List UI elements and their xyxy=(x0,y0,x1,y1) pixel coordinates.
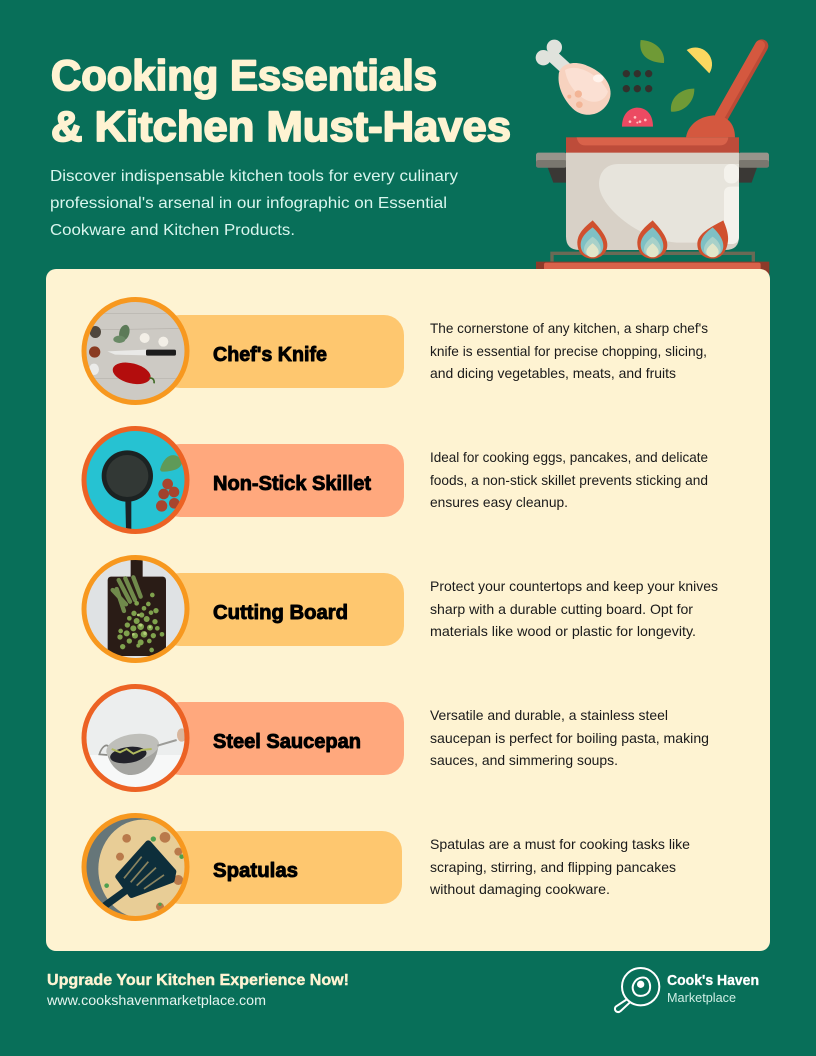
description: and dicing vegetables, meats, and fruits xyxy=(430,365,676,381)
icon: peppercorns xyxy=(623,70,652,92)
description xyxy=(430,578,718,639)
item: non-stick skillet xyxy=(80,423,708,533)
description: ensures easy cleanup. xyxy=(430,494,568,510)
photo: skillet and tomatoes xyxy=(86,431,184,529)
title: & Kitchen Must-Haves xyxy=(51,103,511,151)
icon: flames xyxy=(577,220,728,259)
intro text: professional's arsenal in our infographic on Essential xyxy=(50,195,447,212)
label pill xyxy=(160,702,404,775)
description xyxy=(430,320,708,381)
title xyxy=(51,52,511,151)
label: Steel Saucepan xyxy=(213,731,361,753)
description xyxy=(429,836,690,897)
description: The cornerstone of any kitchen, a sharp chef's xyxy=(430,320,708,336)
icon: wooden spoon xyxy=(686,45,762,137)
item: chef's knife xyxy=(80,297,708,407)
photo ring xyxy=(84,428,187,532)
label pill xyxy=(160,831,402,904)
item: steel saucepan xyxy=(80,682,709,792)
description: Protect your countertops and keep your knives xyxy=(430,578,718,594)
photo ring xyxy=(84,558,187,660)
photo ring xyxy=(84,816,187,918)
footer call to action: www.cookshavenmarketplace.com xyxy=(46,993,266,1008)
icon: stove grate xyxy=(536,253,769,276)
item: spatulas xyxy=(80,812,690,922)
icon: lemon slice xyxy=(687,48,712,73)
description: saucepan is perfect for boiling pasta, making xyxy=(430,730,709,746)
description: sauces, and simmering soups. xyxy=(430,752,618,768)
description: foods, a non-stick skillet prevents sticking and xyxy=(430,472,708,488)
title: Cooking Essentials xyxy=(51,52,437,100)
footer call to action: Upgrade Your Kitchen Experience Now! xyxy=(47,972,349,989)
photo: knife, pepper and herbs xyxy=(86,302,184,400)
description: materials like wood or plastic for longevity. xyxy=(430,623,696,639)
logo: Cook's Haven Marketplace xyxy=(615,968,759,1012)
icon: pot xyxy=(536,137,769,250)
description: sharp with a durable cutting board. Opt for xyxy=(430,601,693,617)
icon: leaf lower xyxy=(671,89,694,112)
label pill xyxy=(160,315,404,388)
photo ring xyxy=(84,686,187,790)
description xyxy=(430,707,709,768)
logo: Cook's Haven Marketplace: Marketplace xyxy=(667,991,736,1005)
label: Chef's Knife xyxy=(213,344,327,366)
description: Versatile and durable, a stainless steel xyxy=(430,707,668,723)
intro text xyxy=(50,168,458,239)
photo ring xyxy=(84,300,187,402)
illustration: cooking pot on a stove xyxy=(536,40,769,276)
item: cutting board xyxy=(80,552,718,662)
label pill xyxy=(160,444,404,517)
photo: cutting board with asparagus xyxy=(86,560,184,658)
description: scraping, stirring, and flipping pancakes xyxy=(430,859,676,875)
photo: spatula on omelette xyxy=(86,818,184,916)
icon: chicken drumstick xyxy=(536,40,611,115)
description: without damaging cookware. xyxy=(429,881,610,897)
intro text: Discover indispensable kitchen tools for every culinary xyxy=(50,168,458,185)
description: Ideal for cooking eggs, pancakes, and delicate xyxy=(430,449,708,465)
intro text: Cookware and Kitchen Products. xyxy=(50,222,295,239)
panel: kitchen essentials list xyxy=(46,269,770,951)
photo: steel saucepan xyxy=(86,689,184,787)
label: Cutting Board xyxy=(213,602,348,624)
description xyxy=(430,449,708,510)
label: Non-Stick Skillet xyxy=(213,473,371,495)
description: knife is essential for precise chopping, slicing, xyxy=(430,343,707,359)
icon: tomato slice xyxy=(622,108,653,127)
description: Spatulas are a must for cooking tasks like xyxy=(430,836,690,852)
footer call to action xyxy=(46,972,349,1008)
logo: Cook's Haven Marketplace: Cook's Haven xyxy=(667,973,759,989)
label: Spatulas xyxy=(213,860,298,882)
label pill xyxy=(160,573,404,646)
icon: leaf top xyxy=(640,40,664,63)
icon: frying pan with egg xyxy=(615,968,659,1012)
